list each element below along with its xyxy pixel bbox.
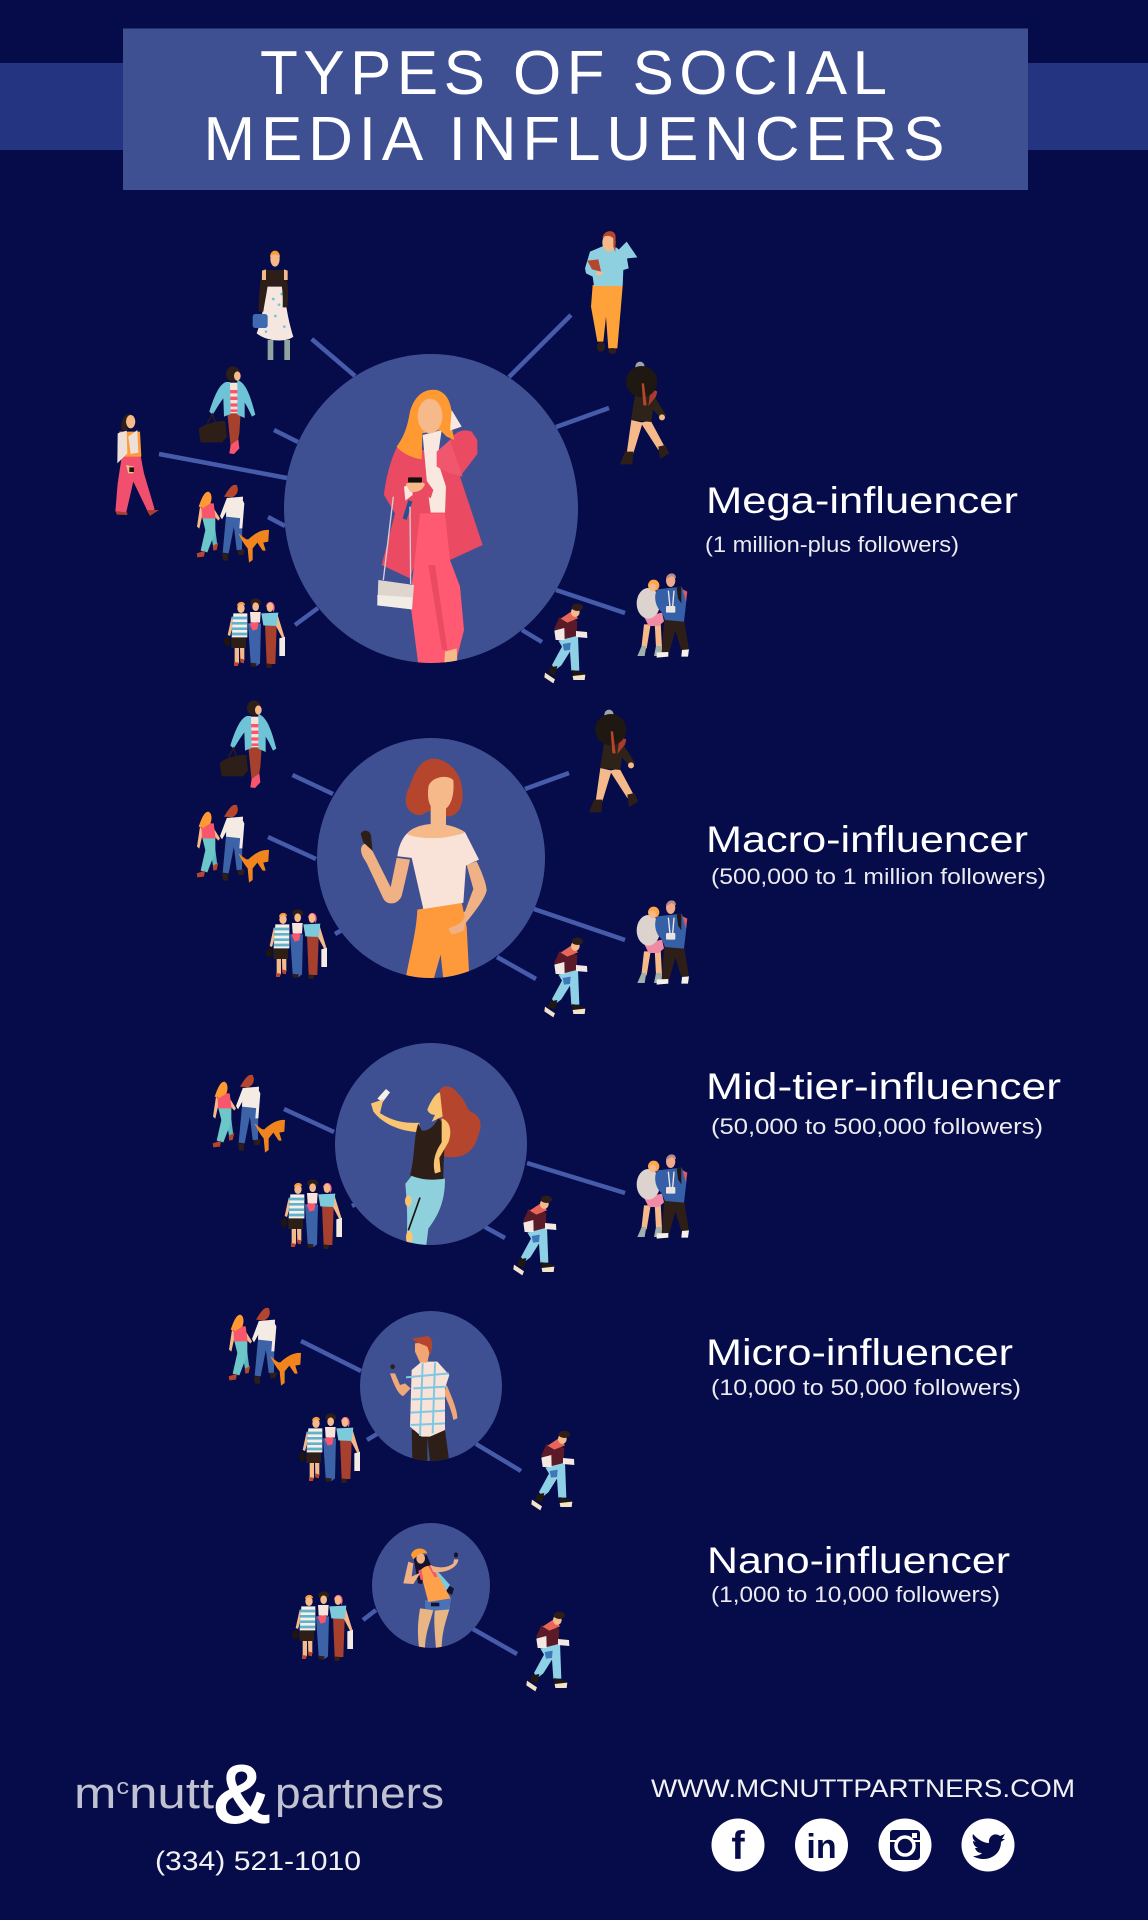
banner band <box>0 63 1148 150</box>
figure: couple with camera <box>637 573 689 658</box>
figure: couple with camera <box>637 900 689 985</box>
icon: facebook <box>712 1818 764 1872</box>
figure: hiker taking selfie <box>403 1549 458 1650</box>
title <box>204 39 944 174</box>
connector lines <box>363 1610 517 1654</box>
panel: mega-influencer tier <box>115 231 1018 683</box>
figure: group of three <box>281 1179 342 1249</box>
icon: facebook: f <box>731 1824 745 1868</box>
figure: couple with camera <box>637 1154 689 1239</box>
logo word: partners: partners <box>275 1769 444 1818</box>
figure: couple with dog <box>197 485 269 563</box>
logo word: mcnutt: nutt <box>129 1769 214 1818</box>
figure: group of three <box>266 909 327 979</box>
circle: macro <box>317 738 545 978</box>
label: nano-influencer: Nano-influencer <box>707 1540 1010 1581</box>
icon: twitter <box>962 1818 1014 1872</box>
figure: group of three <box>292 1591 353 1661</box>
followers: micro: (10,000 to 50,000 followers) <box>711 1375 1021 1400</box>
circle: mega <box>284 354 578 663</box>
circle: nano <box>372 1523 490 1648</box>
footer logo <box>74 1747 444 1841</box>
figure: woman in white top <box>361 759 487 980</box>
label: micro-influencer: Micro-influencer <box>706 1332 1013 1373</box>
label: mega-influencer: Mega-influencer <box>706 480 1018 521</box>
panel: micro-influencer tier <box>229 1308 1021 1510</box>
figure: runner <box>544 938 587 1017</box>
logo ampersand: & <box>212 1747 272 1841</box>
website: WWW.MCNUTTPARTNERS.COM <box>651 1775 1075 1803</box>
figure: couple with dog <box>229 1308 301 1386</box>
followers: mid-tier: (50,000 to 500,000 followers) <box>711 1114 1043 1139</box>
followers: macro: (500,000 to 1 million followers) <box>711 864 1046 889</box>
figure: group of three <box>299 1413 360 1483</box>
figure: runner <box>513 1196 556 1275</box>
circle: micro <box>360 1311 502 1461</box>
social icons <box>712 1818 1014 1872</box>
circle: mid-tier <box>335 1043 527 1245</box>
banner box <box>123 28 1028 190</box>
panel: macro-influencer tier <box>197 700 1046 1017</box>
figure: man with book <box>585 231 637 354</box>
title: MEDIA INFLUENCERS <box>204 105 944 174</box>
figure: group of three <box>224 598 285 668</box>
title: TYPES OF SOCIAL <box>260 39 887 108</box>
icon: linkedin <box>795 1818 848 1872</box>
figure: woman taking selfie <box>371 1086 481 1248</box>
figure: woman in pink trousers <box>115 414 159 516</box>
label: mid-tier-influencer: Mid-tier-influencer <box>706 1066 1061 1107</box>
figure: runner <box>526 1612 569 1691</box>
phone number: (334) 521-1010 <box>155 1846 361 1876</box>
figure: jacket woman <box>220 700 276 788</box>
figure: dress woman <box>253 251 293 360</box>
panel: nano-influencer tier <box>292 1523 1010 1691</box>
figure: couple with dog <box>197 805 269 883</box>
label: macro-influencer: Macro-influencer <box>706 819 1028 860</box>
icon: linkedin: in <box>806 1828 837 1866</box>
icon: instagram <box>878 1818 932 1872</box>
figure: woman in pink coat <box>377 390 483 665</box>
connector lines <box>284 1109 625 1238</box>
figure: jacket woman <box>199 366 255 454</box>
figure: woman in black <box>620 362 669 464</box>
header banner <box>0 28 1148 190</box>
figure: man in plaid shirt <box>390 1336 457 1462</box>
connector lines <box>159 315 625 642</box>
followers: nano: (1,000 to 10,000 followers) <box>711 1582 1000 1607</box>
figure: runner <box>531 1431 574 1510</box>
figure: woman in black <box>589 710 638 812</box>
logo word: mcnutt: m <box>74 1769 111 1818</box>
figure: couple with dog <box>213 1075 285 1153</box>
connector lines <box>268 773 625 979</box>
followers: mega: (1 million-plus followers) <box>705 532 959 557</box>
logo word: mcnutt: c <box>116 1774 129 1799</box>
figure: runner <box>544 604 587 683</box>
panel: mid-tier-influencer tier <box>213 1043 1061 1275</box>
connector lines <box>301 1341 521 1471</box>
